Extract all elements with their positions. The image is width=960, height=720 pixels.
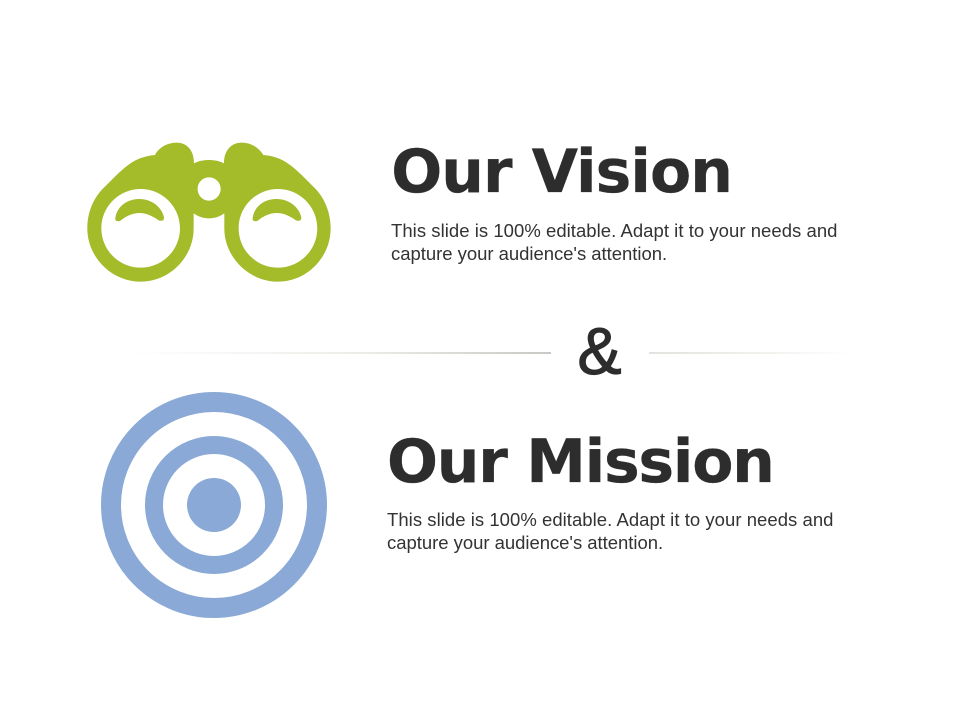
divider line left: [130, 352, 551, 354]
text: mission description: [387, 509, 833, 553]
ampersand: &: [578, 314, 622, 388]
text: mission description: This slide is 100% editable. Adapt it to your needs and: [387, 509, 833, 530]
text: vision description: This slide is 100% editable. Adapt it to your needs and: [391, 220, 837, 241]
text: mission description: capture your audience's attention.: [387, 532, 663, 553]
divider line right: [649, 352, 854, 354]
heading: Our Mission: Our Mission: [387, 427, 774, 497]
icon: target: [101, 392, 327, 618]
heading: Our Vision: Our Vision: [391, 137, 732, 207]
text: vision description: capture your audience's attention.: [391, 243, 667, 264]
text: vision description: [391, 220, 837, 264]
